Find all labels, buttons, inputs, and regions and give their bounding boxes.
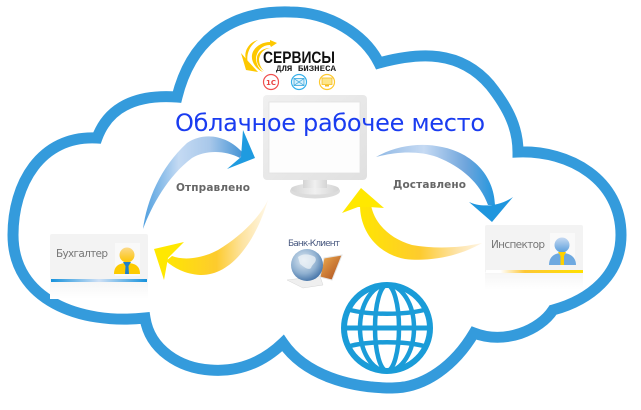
icon: big globe (344, 285, 430, 371)
logo emblem (241, 40, 277, 72)
card reflection (50, 282, 148, 299)
monitor frame (263, 95, 367, 180)
logo tagline: ДЛЯ БИЗНЕСА (276, 65, 336, 74)
icon: globe (291, 249, 323, 281)
avatar: inspector (549, 233, 576, 265)
avatar: accountant (114, 243, 140, 276)
arrow: to monitor, blue (143, 130, 255, 229)
label: delivered: Доставлено (393, 179, 466, 191)
card: inspector (485, 225, 583, 290)
title: Облачное рабочее место (175, 109, 485, 137)
card reflection (485, 273, 583, 290)
monitor stand (290, 178, 340, 198)
label: sent: Отправлено (176, 182, 250, 194)
icon: laptop (287, 255, 342, 288)
arrow: to monitor, yellow (342, 188, 482, 260)
icon: monitor (320, 74, 334, 90)
icon: mail (292, 74, 306, 90)
icon: 1C: 1С (266, 79, 276, 87)
arrow: from monitor, blue (376, 145, 513, 222)
card body (50, 234, 148, 282)
logo: Сервисы для бизнеса (241, 40, 336, 90)
card bar (51, 279, 147, 282)
card name: Бухгалтер (56, 248, 108, 260)
bank client (287, 239, 342, 288)
card bar (486, 270, 583, 273)
monitor (263, 95, 367, 198)
arrow: to accountant, yellow (154, 200, 268, 280)
card: accountant (50, 234, 148, 299)
bank client label: Банк-Клиент (288, 239, 340, 249)
logo wordmark: СЕРВИСЫ (263, 49, 335, 67)
card name: Инспектор (491, 239, 545, 251)
monitor screen (269, 102, 360, 173)
card body (485, 225, 583, 273)
